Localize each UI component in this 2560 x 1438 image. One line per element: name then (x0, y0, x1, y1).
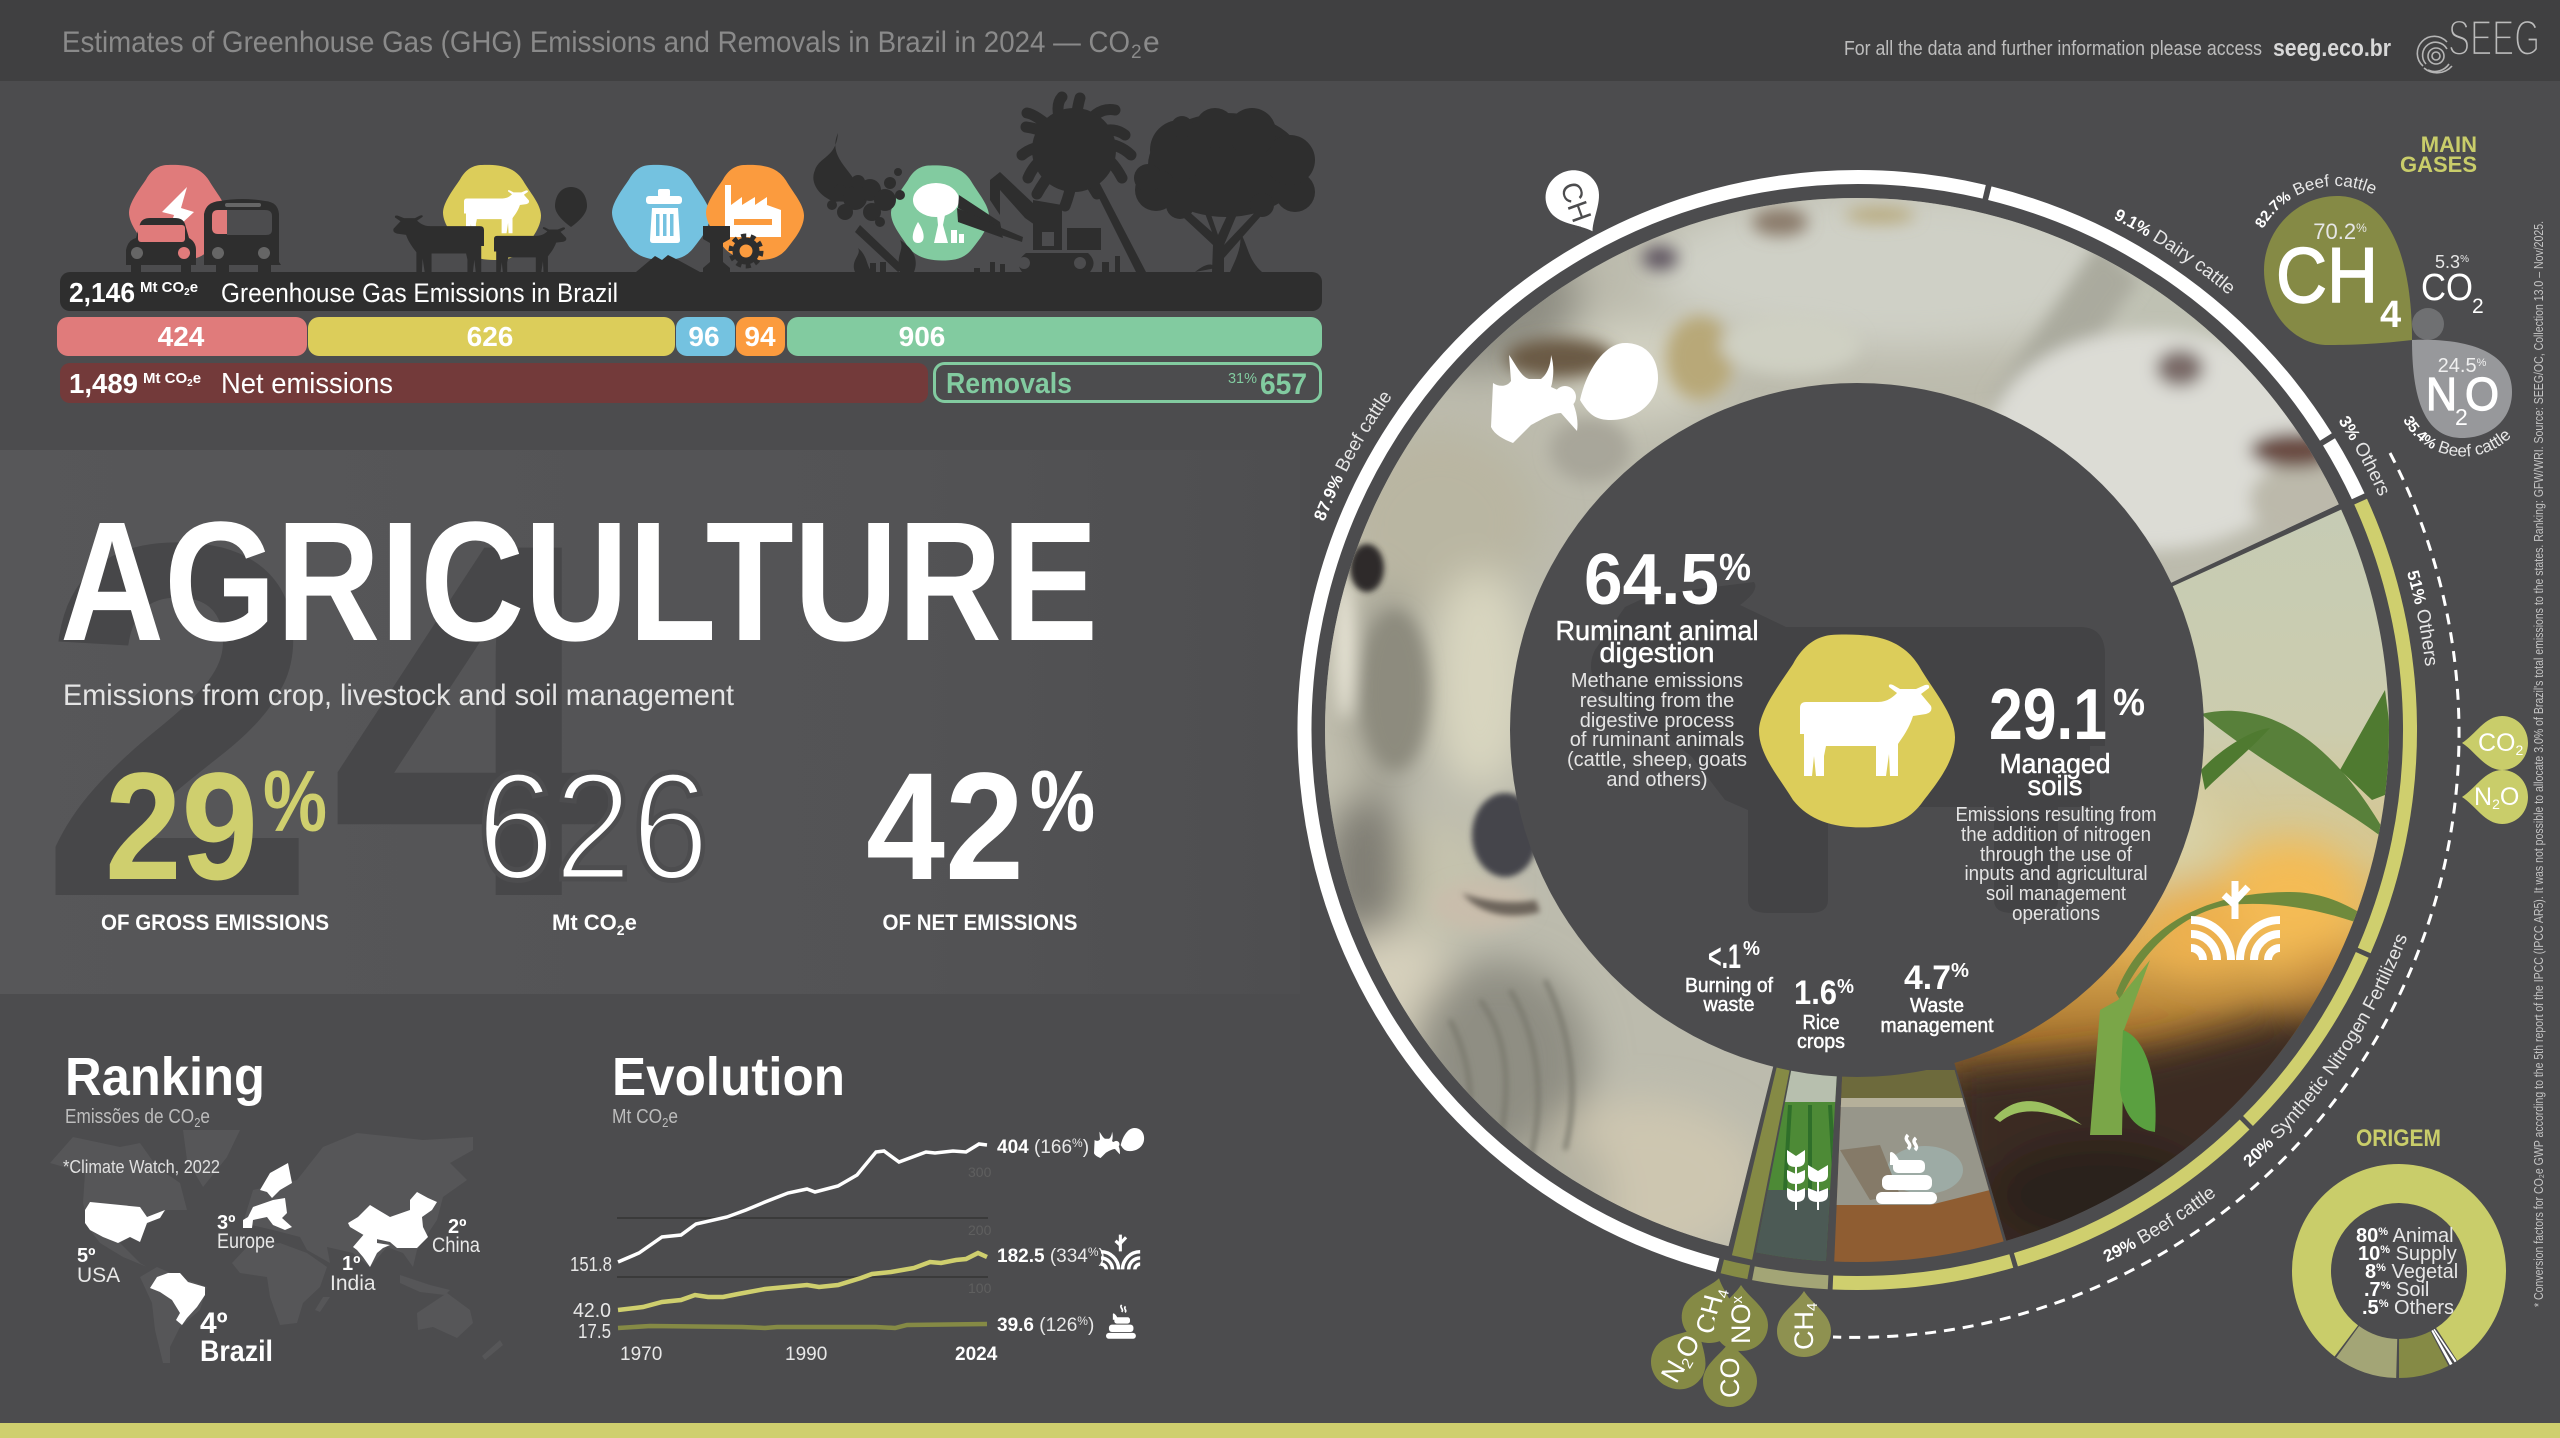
stat: waste management: 4.7 (1904, 959, 1951, 997)
header bar: seeg.eco.br (2273, 35, 2391, 62)
header bar: For all the data and further information please access (1844, 38, 2262, 60)
stat: ruminant digestion: digestive process (1580, 710, 1734, 732)
sector bars: 94 (744, 321, 776, 352)
silhouettes: cattle (393, 187, 587, 272)
panel: ranking: Emissões de CO (65, 1106, 215, 1128)
gas drops: bottom: 4 (1804, 1303, 1821, 1311)
total emissions bar: Greenhouse Gas Emissions in Brazil (221, 278, 618, 308)
icon: lightning (162, 187, 194, 237)
icon: factory (725, 185, 781, 237)
stat: ruminant digestion: Methane emissions (1571, 670, 1743, 692)
gas: nitrous oxide: 24.5 (2438, 355, 2477, 377)
stat: burning of waste (1685, 938, 1773, 1016)
ring labels: 29% Beef cattle (2103, 1189, 2215, 1262)
gas: carbon dioxide (2412, 252, 2484, 340)
rank labels: 1º (342, 1253, 360, 1275)
gas: carbon dioxide: % (2460, 254, 2469, 265)
rank labels: 4º (200, 1307, 228, 1340)
gas drop: methane top: CH (1554, 178, 1597, 226)
series labels: % (1077, 1314, 1088, 1328)
gas: nitrous oxide: N (2426, 368, 2457, 420)
footer band (0, 1423, 2560, 1438)
net emissions bar (60, 363, 928, 403)
stat: net share: % (1030, 754, 1095, 850)
line chart: 1990 (785, 1344, 827, 1365)
gas drops: soil side: CO (2478, 729, 2516, 757)
stat: managed soils: soils (2028, 770, 2082, 801)
silhouette: palm tree (1022, 97, 1146, 272)
gas: nitrous oxide: % (2477, 357, 2487, 369)
series labels (997, 1136, 1105, 1336)
series labels: % (1072, 1136, 1083, 1150)
stat: gross share (101, 741, 329, 935)
highlighted countries (85, 1163, 437, 1325)
gas: nitrous oxide: 2 (2455, 404, 2468, 430)
stat: managed soils: through the use of (1980, 844, 2132, 866)
gas drops: bottom: CO (1715, 1358, 1745, 1398)
header bar (0, 0, 2560, 81)
panel: ranking (50, 1047, 503, 1368)
panel: evolution (570, 1047, 1144, 1365)
heading: MAIN (2421, 132, 2477, 157)
rank labels: India (330, 1272, 376, 1295)
header bar: 2 (1131, 42, 1142, 63)
total emissions bar (60, 272, 1322, 311)
net emissions bar: Net emissions (221, 368, 393, 400)
silhouettes: fire, bush, excavator (813, 133, 1120, 272)
silhouette: tree (1134, 108, 1315, 272)
stat: waste management: Waste (1910, 995, 1964, 1017)
icon: rice (1787, 1150, 1828, 1210)
donut labels: % (2378, 1226, 2388, 1238)
gas drops: bottom: CH (1690, 1292, 1729, 1337)
rank labels: USA (77, 1264, 120, 1287)
gas drops: soil side: O (2500, 783, 2519, 811)
gas: carbon dioxide: CO (2421, 267, 2473, 309)
ring: animal segments (1305, 177, 2358, 1265)
icon: forest and fire (913, 183, 964, 243)
total emissions bar: 2 (184, 287, 190, 298)
heading: Evolution (612, 1047, 845, 1107)
gas: nitrous oxide: O (2465, 368, 2499, 420)
donut labels: Vegetal (2386, 1261, 2458, 1283)
donut labels: 8 (2365, 1261, 2376, 1283)
stat: gross share: OF GROSS EMISSIONS (101, 910, 329, 935)
line chart: 1970 (620, 1344, 662, 1365)
donut labels: 10 (2358, 1243, 2380, 1265)
panel: agriculture summary (0, 439, 1300, 1003)
removals bar: 657 (1260, 368, 1307, 401)
icon: managed soil (2191, 881, 2280, 960)
stat: managed soils: 29.1 (1989, 675, 2107, 755)
heading: AGRICULTURE (60, 487, 1098, 677)
gas: methane: 70.2 (2313, 219, 2356, 244)
ring labels: 3% Others (2340, 416, 2388, 496)
total emissions bar: e (190, 279, 198, 296)
net emissions bar: 1,489 (69, 368, 138, 399)
donut labels: Supply (2390, 1243, 2457, 1265)
silhouettes: waste and industry (636, 226, 761, 272)
line chart: 17.5 (578, 1321, 611, 1343)
line chart: 200 (968, 1222, 992, 1238)
icon: white cow (464, 190, 529, 233)
stat: gross share: % (263, 754, 327, 850)
heading: Ranking (65, 1047, 265, 1107)
wedge: burning of waste (1732, 1066, 1790, 1260)
gas: methane: CH (2276, 231, 2378, 319)
sector bars: 424 (158, 321, 205, 352)
ring labels: 20% Synthetic Nitrogen Fertilizers (2244, 934, 2406, 1168)
ring: soil and other segments (1722, 502, 2410, 1283)
heading: GASES (2400, 152, 2477, 177)
gas drops: soil side: N (2474, 783, 2492, 811)
series labels: 39.6 (126 (997, 1315, 1077, 1336)
gas drops: bottom: O (1669, 1329, 1706, 1363)
line chart: 151.8 (570, 1254, 612, 1276)
gas drop: methane top (1536, 161, 1616, 245)
silhouettes: vehicles (126, 199, 281, 272)
stat: managed soils: % (2113, 682, 2145, 724)
stat: megatonnes: 2 (617, 922, 625, 938)
photo: corn sector (1954, 510, 2389, 1240)
icon: cattle series (1094, 1128, 1144, 1158)
donut labels: % (2376, 1262, 2386, 1274)
gas share labels (2256, 174, 2510, 457)
inner disc (1510, 383, 2204, 1077)
removals bar: Removals (946, 368, 1072, 400)
donut labels: Soil (2390, 1279, 2429, 1301)
large cow silhouette (1591, 582, 2105, 913)
emissions overview panel (57, 97, 1322, 403)
stat: net share: OF NET EMISSIONS (882, 910, 1078, 935)
stat: managed soils: Emissions resulting from (1956, 804, 2156, 826)
background year: 2 (38, 439, 319, 1003)
series labels: 404 (166 (997, 1137, 1072, 1158)
panel: origin donut (2311, 1125, 2486, 1358)
donut labels: % (2381, 1280, 2391, 1292)
stat: burning of waste: % (1743, 938, 1760, 960)
stat: megatonnes: 626 (477, 741, 709, 912)
icon: soils series (1101, 1235, 1140, 1269)
heading: ORIGEM (2356, 1125, 2441, 1152)
panel: evolution: 2 (662, 1115, 668, 1130)
gas drop: methane top: 4 (1567, 221, 1585, 234)
gas drops: bottom: 4 (1714, 1288, 1733, 1300)
sector bars (57, 317, 1322, 356)
gas: carbon dioxide: 5.3 (2435, 252, 2460, 272)
sector bars: 96 (688, 321, 720, 352)
gas share labels: 35.4% Beef cattle (2404, 416, 2510, 457)
ring labels: 9.1% Dairy cattle (2114, 210, 2234, 294)
series labels: ) (1088, 1315, 1094, 1336)
stat: ruminant digestion: (cattle, sheep, goats (1567, 749, 1747, 771)
header bar: e (1143, 26, 1160, 59)
stat: gross share: 29 (105, 741, 258, 912)
rank labels: 5º (77, 1245, 95, 1267)
rank labels: Brazil (200, 1335, 273, 1368)
gas: carbon dioxide: 2 (2472, 295, 2484, 318)
rank labels (77, 1212, 480, 1368)
gas: methane: % (2356, 221, 2367, 235)
stat: net share: 42 (866, 741, 1024, 912)
rank labels: 2º (448, 1216, 466, 1238)
gas: nitrous oxide (2412, 340, 2512, 438)
gas drops: bottom: CH (1789, 1311, 1819, 1350)
gas: methane (2264, 196, 2412, 345)
stat: managed soils: inputs and agricultural (1964, 863, 2148, 885)
ring labels: 87.9% Beef cattle (1314, 392, 1391, 520)
gas drops: soil side: 2 (2492, 796, 2500, 812)
donut labels: 80 (2356, 1225, 2378, 1247)
donut chart (2311, 1184, 2486, 1358)
footnote: *Climate Watch, 2022 (63, 1157, 220, 1177)
SEEG logo (2417, 10, 2540, 73)
stat: rice crops: Rice (1802, 1012, 1840, 1034)
line chart: 2024 (955, 1344, 998, 1365)
photo: waste management sector (1834, 1070, 2004, 1262)
series labels: 182.5 (334 (997, 1246, 1088, 1267)
stat: ruminant digestion: of ruminant animals (1570, 729, 1744, 751)
icon: cattle (1491, 343, 1658, 443)
background year (0, 439, 614, 1003)
stat: managed soils: the addition of nitrogen (1961, 824, 2151, 846)
gas share labels: 82.7% Beef cattle (2256, 174, 2376, 228)
line chart: 100 (968, 1280, 992, 1296)
stat: ruminant digestion: Ruminant animal (1556, 615, 1758, 646)
photo: rice sector (1756, 1070, 1837, 1261)
stat: megatonnes: Mt CO (552, 910, 617, 935)
donut labels: Others (2388, 1297, 2454, 1319)
background year: 4 (330, 439, 614, 1003)
donut labels: % (2380, 1244, 2390, 1256)
stat: ruminant digestion: % (1719, 547, 1751, 589)
donut labels (2356, 1225, 2458, 1319)
stat: managed soils: soil management (1986, 883, 2126, 905)
rank labels: 3º (217, 1212, 235, 1234)
dashed gas connector (1833, 453, 2459, 1337)
net emissions bar: Mt CO (143, 370, 187, 387)
stat: rice crops: 1.6 (1794, 974, 1837, 1012)
gas drops: bottom (1641, 1271, 1831, 1407)
removals bar: 31% (1228, 370, 1257, 387)
stat: rice crops: % (1837, 976, 1854, 998)
sector blobs (129, 165, 989, 260)
series labels: % (1088, 1245, 1099, 1259)
stat: rice crops: crops (1797, 1031, 1845, 1053)
panel: ranking: e (200, 1106, 210, 1128)
donut labels: .7 (2364, 1279, 2381, 1301)
footnote: sources: * Conversion factors for CO₂e GWP according to the 5th report of the IPCC (IPCC AR5). It was not possible to allocate 3.0% of Brazil's total emissions to the states. Ranking: GFW/WRI. Source: SEEG/OC, Collection 13.0 – Nov/2025. (2531, 221, 2546, 1307)
chart: emissions wheel (1298, 170, 2528, 1407)
donut labels: % (2379, 1298, 2389, 1310)
stat: burning of waste: waste (1703, 994, 1754, 1016)
stat: ruminant digestion: 64.5 (1584, 540, 1719, 620)
series labels: ) (1083, 1137, 1089, 1158)
sector bars: 626 (467, 321, 513, 352)
gas drops: bottom: N (1655, 1355, 1691, 1388)
stat: waste management (1880, 959, 1994, 1037)
stat: burning of waste: Burning of (1685, 975, 1773, 997)
stat: managed soils (1956, 675, 2156, 925)
series labels: ) (1099, 1246, 1105, 1267)
donut labels: .5 (2362, 1297, 2379, 1319)
rank labels: China (432, 1234, 480, 1257)
stat: waste management: management (1880, 1015, 1994, 1037)
subtitle: Emissions from crop, livestock and soil management (63, 679, 735, 712)
panel: ranking: 2 (194, 1115, 200, 1130)
heading (2400, 132, 2477, 177)
icon: waste series (1106, 1305, 1136, 1339)
gas drops: bottom: NO (1726, 1304, 1756, 1344)
donut labels: Animal (2388, 1225, 2454, 1247)
sector bars: 906 (899, 321, 945, 352)
stat: megatonnes: e (625, 910, 637, 935)
stat: ruminant digestion: resulting from the (1580, 690, 1734, 712)
panel: evolution: Mt CO (612, 1106, 670, 1128)
panel: evolution: e (668, 1106, 678, 1128)
stat: burning of waste: <.1 (1708, 938, 1741, 976)
net emissions bar: e (193, 370, 201, 387)
removals bar (934, 364, 1320, 402)
gas drops: soil side (2462, 716, 2528, 824)
gas: methane: 4 (2380, 294, 2401, 336)
stat: net share (866, 741, 1095, 935)
ring labels (1314, 210, 2436, 1262)
rank labels: Europe (217, 1230, 275, 1253)
line chart: 42.0 (573, 1300, 611, 1322)
total emissions bar: 2,146 (69, 277, 135, 308)
world map (50, 1130, 503, 1363)
stat: rice crops (1794, 974, 1854, 1053)
central cow badge (1759, 634, 1955, 827)
icon: trash bin (646, 189, 682, 243)
ring labels: 51% Others (2408, 570, 2436, 666)
icon: waste (1876, 1135, 1937, 1204)
stat: managed soils: Managed (2000, 748, 2110, 779)
gas drops: bottom: 2 (1678, 1356, 1697, 1371)
stat: waste management: % (1951, 960, 1969, 982)
stat: managed soils: operations (2012, 903, 2100, 925)
photo: cattle sector (1325, 198, 2339, 1246)
net emissions bar: 2 (187, 378, 193, 389)
gas drops: bottom: x (1729, 1296, 1746, 1304)
line chart: 300 (968, 1164, 992, 1180)
line chart (570, 1144, 998, 1365)
total emissions bar: Mt CO (140, 279, 184, 296)
stat: ruminant digestion (1556, 540, 1758, 791)
stat: ruminant digestion: digestion (1600, 637, 1714, 668)
title: Estimates of Greenhouse Gas (GHG) Emissions and Removals in Brazil in 2024 — CO (62, 26, 1130, 59)
panel: main gases (2256, 132, 2512, 457)
gas drops: soil side: 2 (2516, 742, 2524, 758)
stat: ruminant digestion: and others) (1606, 769, 1708, 791)
